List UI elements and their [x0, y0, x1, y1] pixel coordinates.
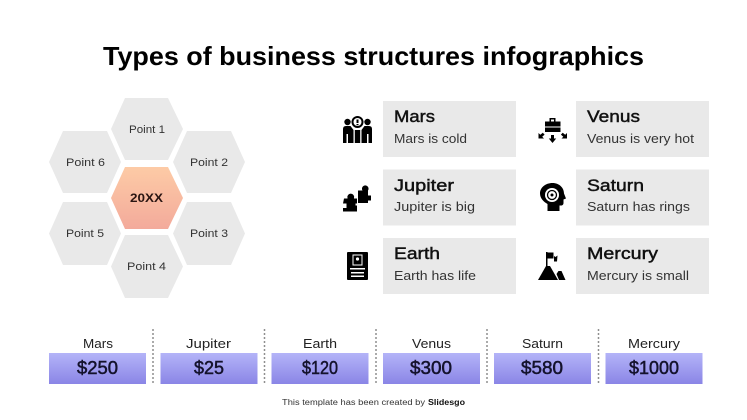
- hexagon: Point 2: Point 2: [190, 157, 228, 169]
- card: Saturn: Saturn has rings: [587, 199, 691, 214]
- price: Mercury: $1000: [629, 358, 679, 378]
- hexagon: center 20XX: 20XX: [130, 191, 163, 205]
- card: Earth: Earth has life: [394, 268, 476, 283]
- price: Saturn: [494, 336, 591, 384]
- hexagon: Point 3: Point 3: [190, 228, 228, 240]
- hexagon: center 20XX: [111, 167, 183, 229]
- card: Mercury: Mercury: [587, 244, 659, 263]
- card: Saturn: Saturn: [587, 176, 644, 195]
- hexagon: Point 4: Point 4: [127, 261, 166, 273]
- card: Mars: [383, 101, 516, 157]
- card: Mercury: [576, 238, 709, 294]
- footer credit: Slidesgo: [428, 398, 465, 407]
- hexagon: Point 1: [111, 98, 183, 160]
- price: Earth: $120: [302, 358, 338, 378]
- card: Jupiter: Jupiter: [394, 176, 454, 195]
- icon: team with question: [343, 116, 372, 143]
- hexagon: Point 6: Point 6: [66, 157, 105, 169]
- hexagon diagram: [49, 98, 245, 298]
- card: Mercury: Mercury is small: [587, 268, 689, 283]
- card: Venus: [576, 101, 709, 157]
- hexagon: Point 2: [173, 131, 245, 193]
- card: Venus: Venus: [587, 107, 640, 126]
- title: Types of business structures infographics: [103, 41, 644, 71]
- price: Saturn: Saturn: [522, 336, 563, 351]
- hexagon: Point 5: Point 5: [66, 228, 104, 240]
- card: Mars: Mars: [394, 107, 435, 126]
- icon: puzzle pieces: [343, 185, 371, 212]
- price: Jupiter: Jupiter: [186, 336, 232, 351]
- price: Mars: Mars: [83, 336, 114, 351]
- price: Jupiter: $25: [194, 358, 224, 378]
- price: Jupiter: [160, 336, 258, 384]
- card: Earth: Earth: [394, 244, 440, 263]
- icon: profile document: [347, 252, 368, 280]
- price: Mercury: [606, 336, 702, 384]
- icon: mountain with flag: [538, 252, 566, 280]
- icon: head with target: [540, 183, 566, 211]
- card: Jupiter: [383, 170, 516, 226]
- price: Venus: Venus: [412, 336, 452, 351]
- hexagon: Point 4: [111, 235, 183, 298]
- price: Saturn: $580: [521, 358, 563, 378]
- icon: briefcase with arrows: [538, 118, 567, 143]
- card: Jupiter: Jupiter is big: [394, 199, 475, 214]
- card: Mars: Mars is cold: [394, 131, 467, 146]
- footer credit: [282, 398, 465, 407]
- price: Mars: $250: [77, 358, 118, 378]
- price: Earth: [272, 336, 368, 384]
- hexagon: Point 6: [49, 131, 121, 193]
- card: Saturn: [576, 170, 709, 226]
- hexagon: Point 3: [173, 202, 245, 265]
- price: Earth: Earth: [303, 336, 337, 351]
- card: Earth: [383, 238, 516, 294]
- price: Mercury: Mercury: [628, 336, 681, 351]
- card: Venus: Venus is very hot: [587, 131, 694, 146]
- price: Venus: $300: [410, 358, 452, 378]
- price: Mars: [49, 336, 146, 384]
- footer credit: This template has been created by: [282, 398, 425, 407]
- hexagon: Point 5: [49, 202, 121, 265]
- price: Venus: [383, 336, 480, 384]
- hexagon: Point 1: Point 1: [129, 124, 165, 136]
